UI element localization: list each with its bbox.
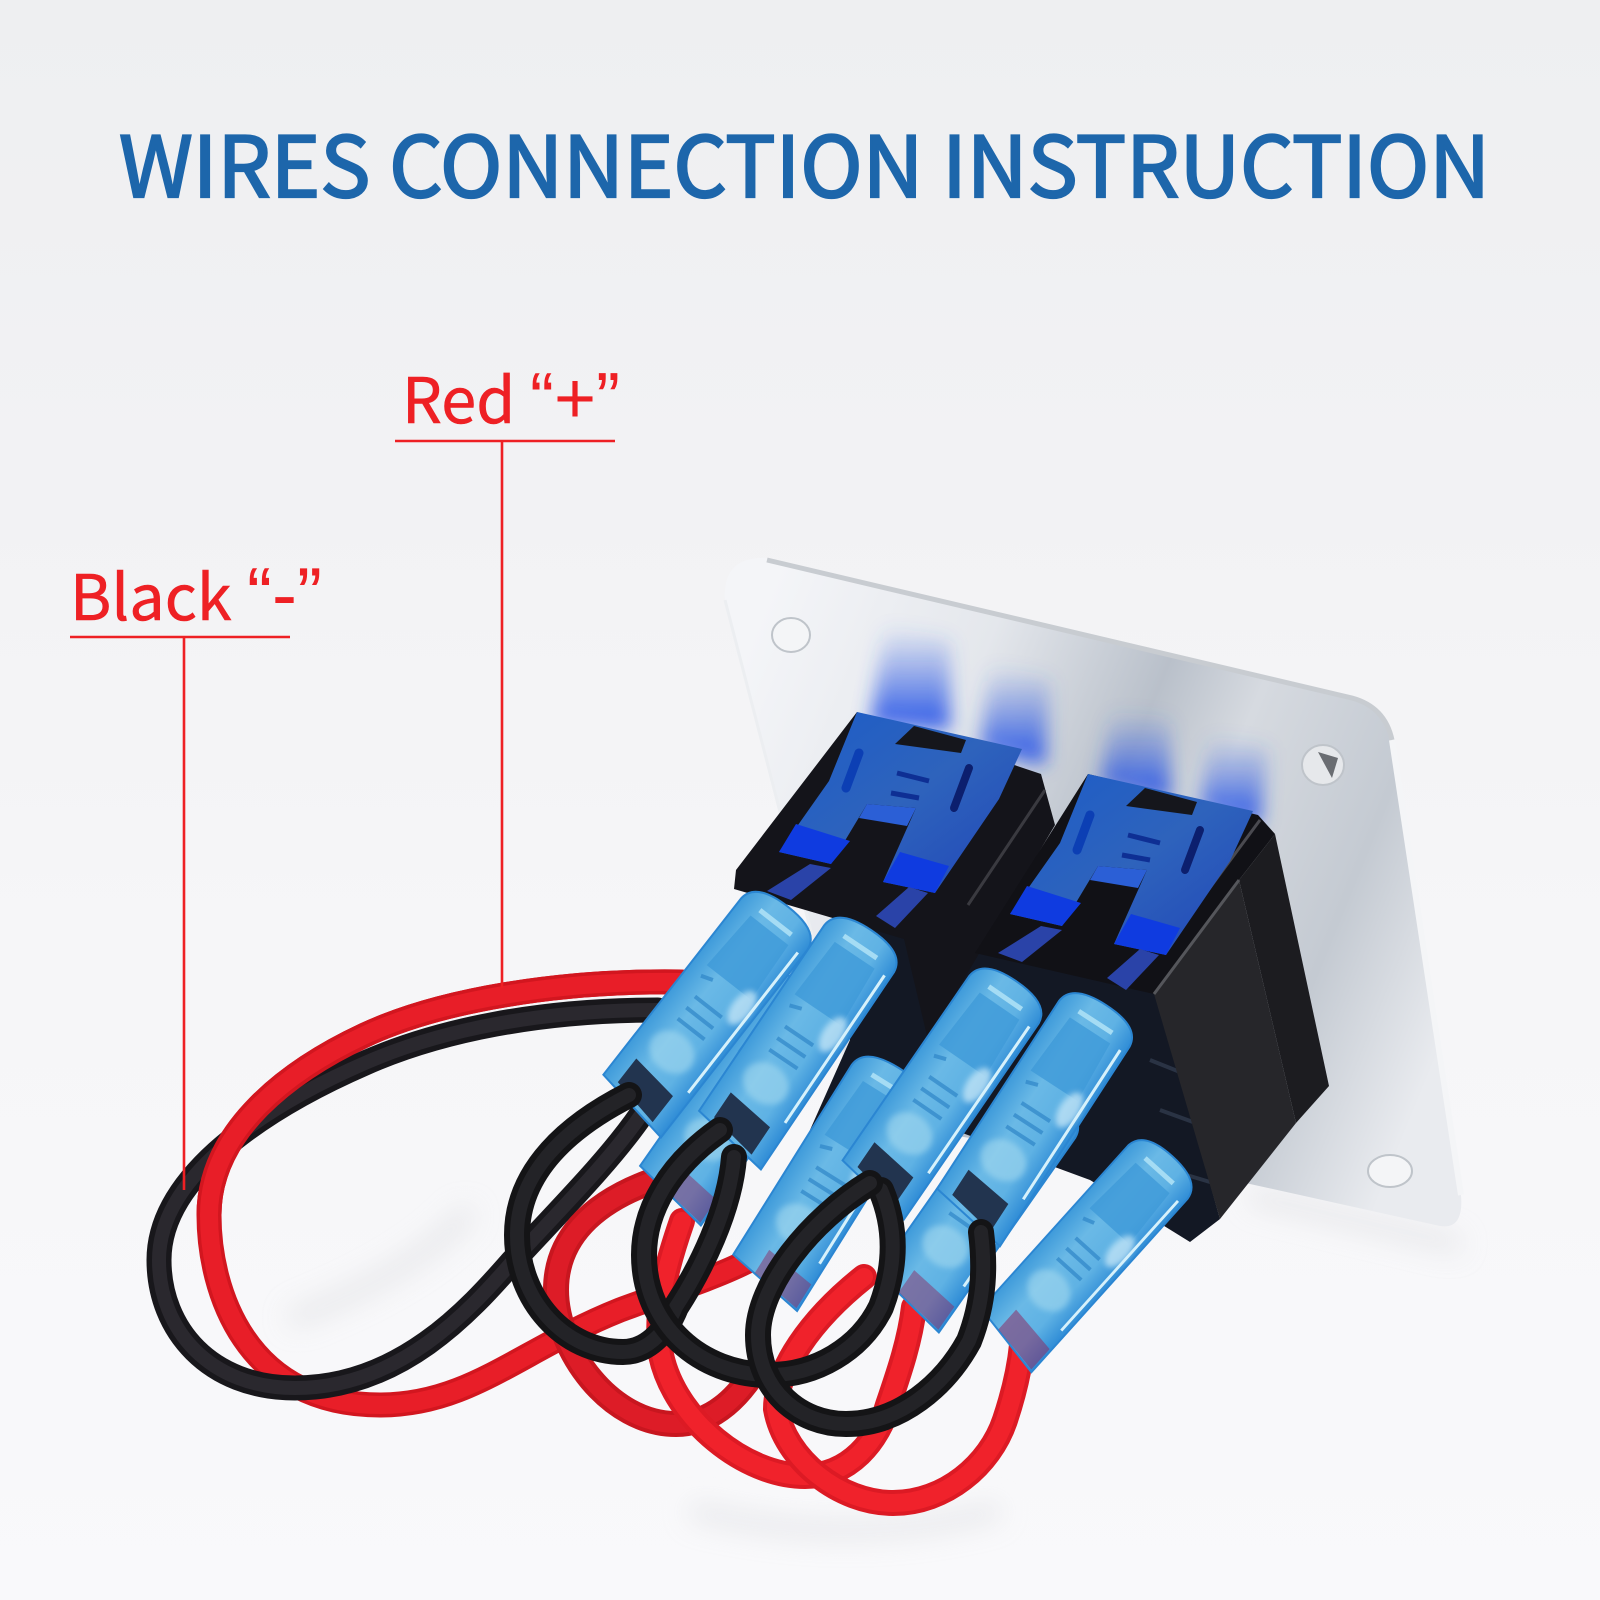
callout: black negative wire: “-” (247, 552, 322, 636)
left blue clip (767, 712, 1022, 928)
shadows on the table (290, 1195, 1460, 1530)
lower row terminals (632, 964, 1202, 1372)
mounting holes (772, 618, 1412, 1187)
callout: red positive wire (395, 351, 620, 988)
black loops (517, 1095, 983, 1424)
callout: red positive wire: “+” (530, 359, 620, 439)
red loops (556, 1183, 1022, 1503)
title: WIRES CONNECTION INSTRUCTION (119, 101, 1490, 222)
callout: black negative wire (70, 548, 322, 1190)
blue LED glow (870, 625, 1268, 825)
right switch body (975, 774, 1329, 1219)
product photo: switch panel with wires (70, 351, 1461, 1530)
rear switch terminals block (810, 915, 1220, 1242)
big black wire (159, 1010, 658, 1388)
aluminium mounting plate (725, 558, 1461, 1226)
left switch body (734, 712, 1055, 1040)
big red wire (209, 982, 746, 1405)
upper row terminals (595, 881, 1142, 1246)
callout: red positive wire: Red (402, 351, 515, 442)
big red wire, upper crossing section (209, 982, 682, 1215)
callout: black negative wire: Black (70, 548, 232, 639)
right blue clip (998, 774, 1253, 990)
